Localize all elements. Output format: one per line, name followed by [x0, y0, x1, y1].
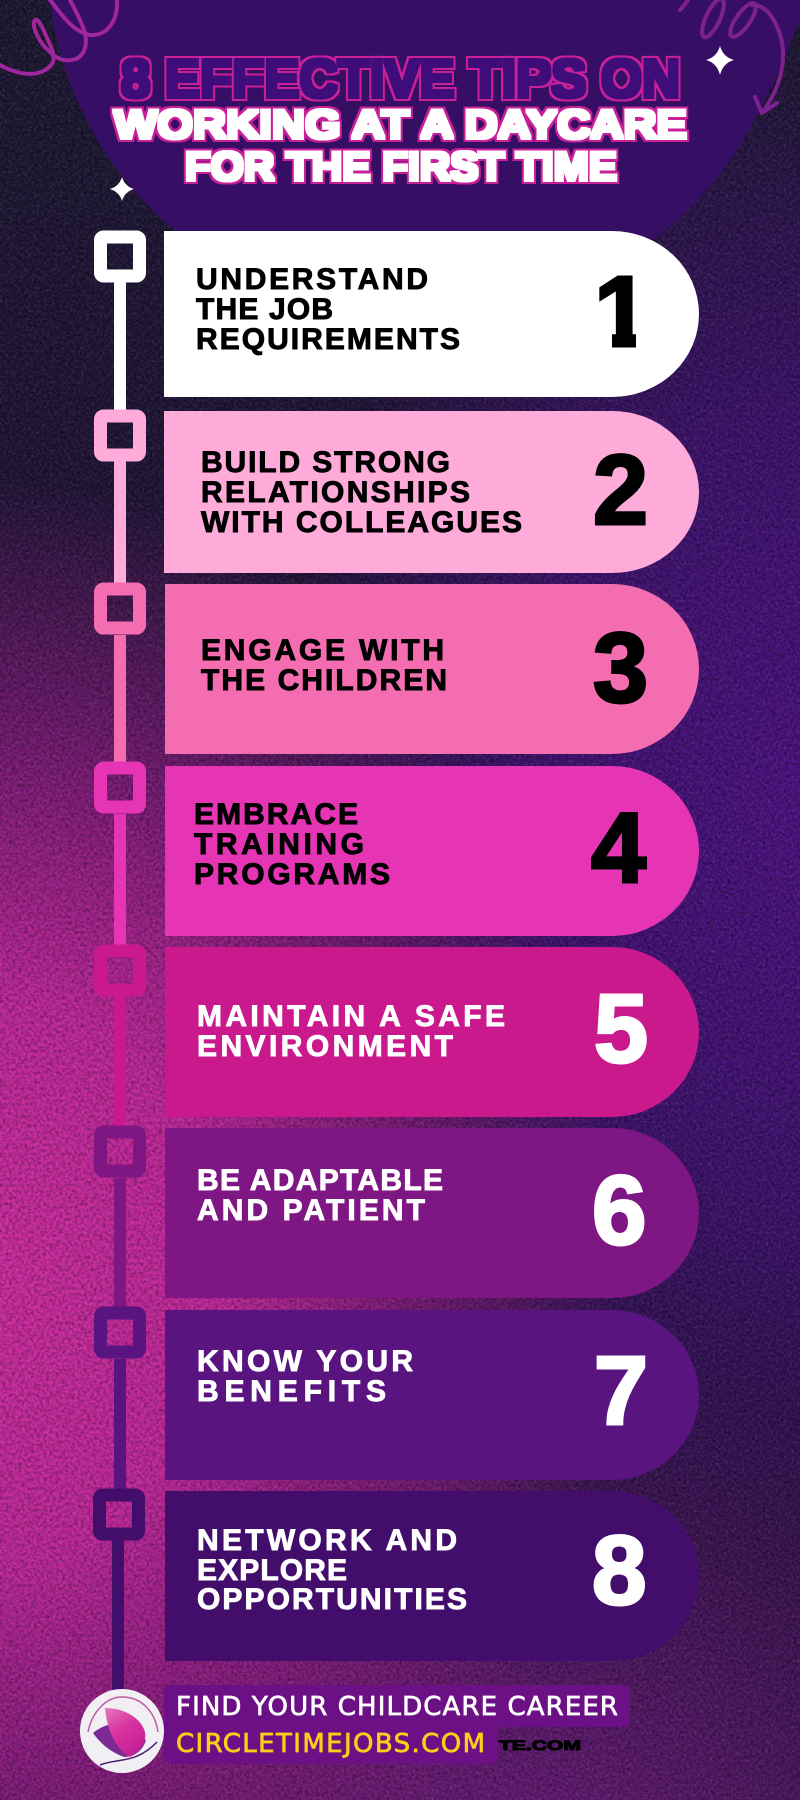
timeline node 4 — [100, 768, 140, 807]
tip 8 number: 8 — [592, 1515, 647, 1625]
tip 2 number: 2 — [593, 434, 648, 545]
header background blob — [50, 0, 800, 245]
tip 1 text: REQUIREMENTS — [196, 323, 460, 356]
footer banner — [164, 1685, 630, 1764]
panel: tip 5 — [165, 947, 699, 1117]
tip 8 text — [197, 1524, 467, 1616]
panel: tip 1 — [164, 231, 699, 397]
tip 1 text: THE JOB — [196, 293, 333, 326]
tip 3 text — [201, 634, 447, 697]
footer call to action: FIND YOUR CHILDCARE CAREER — [176, 1692, 618, 1722]
tip 7 text — [197, 1345, 413, 1408]
tip 2 text: WITH COLLEAGUES — [201, 506, 522, 539]
tip 8 text: EXPLORE — [197, 1554, 347, 1587]
tip 2 text — [201, 446, 522, 539]
tip 3 text: ENGAGE WITH — [201, 634, 444, 667]
panel: tip 4 — [165, 766, 699, 936]
tip 4 number: 4 — [591, 792, 646, 903]
tip 4 text: PROGRAMS — [194, 858, 390, 891]
timeline node 6 — [100, 1132, 140, 1171]
logo — [80, 1689, 164, 1773]
tip 5 text: ENVIRONMENT — [197, 1030, 453, 1063]
decorative swirl and arrow: top right — [680, 0, 783, 113]
panel: tip 2 — [164, 411, 699, 573]
timeline node 2 — [100, 416, 140, 455]
tip 8 text: OPPORTUNITIES — [197, 1583, 467, 1616]
timeline node 3 — [100, 589, 140, 628]
tip 1 text: UNDERSTAND — [196, 263, 428, 296]
panel: tip 6 — [165, 1128, 699, 1298]
tip 1 number: 1 — [594, 256, 650, 368]
title: WORKING AT A DAYCARE — [114, 103, 687, 147]
tip 4 text: EMBRACE — [194, 798, 358, 831]
sparkle icon: top right — [706, 46, 734, 75]
timeline node 8 — [100, 1495, 138, 1534]
title: 8 EFFECTIVE TIPS ON — [121, 49, 680, 109]
sparkle icon: left — [110, 177, 134, 201]
tip 4 text — [194, 798, 390, 891]
panel: tip 8 — [165, 1491, 699, 1661]
tip 5 number: 5 — [594, 974, 648, 1083]
leftover footer url text: TE.COM — [499, 1737, 581, 1753]
tip 8 text: NETWORK AND — [197, 1524, 457, 1557]
footer website: CIRCLETIMEJOBS.COM — [176, 1729, 485, 1759]
tip 5 text: MAINTAIN A SAFE — [197, 1000, 505, 1033]
tip 6 text: AND PATIENT — [197, 1194, 425, 1227]
title — [114, 49, 687, 189]
tip 2 text: BUILD STRONG — [201, 446, 450, 479]
timeline node 7 — [100, 1313, 140, 1352]
tip 3 text: THE CHILDREN — [201, 664, 447, 697]
tip 6 number: 6 — [592, 1155, 647, 1265]
timeline node 5 — [100, 951, 140, 990]
tip 4 text: TRAINING — [194, 828, 364, 861]
tip 2 text: RELATIONSHIPS — [201, 476, 470, 509]
timeline connector segments — [112, 282, 126, 1692]
decorative swirl: top left — [0, 0, 117, 74]
tip 7 number: 7 — [594, 1336, 648, 1445]
tip 6 text — [197, 1164, 443, 1227]
timeline node 1 — [100, 237, 140, 276]
tip 3 number: 3 — [593, 612, 648, 723]
tip 6 text: BE ADAPTABLE — [197, 1164, 443, 1197]
title: FOR THE FIRST TIME — [185, 145, 617, 189]
tip 7 text: KNOW YOUR — [197, 1345, 413, 1378]
tip 5 text — [197, 1000, 505, 1063]
tip 7 text: BENEFITS — [197, 1375, 386, 1408]
panel: tip 3 — [165, 584, 699, 754]
panel: tip 7 — [165, 1310, 699, 1480]
tip 1 text — [196, 263, 460, 356]
